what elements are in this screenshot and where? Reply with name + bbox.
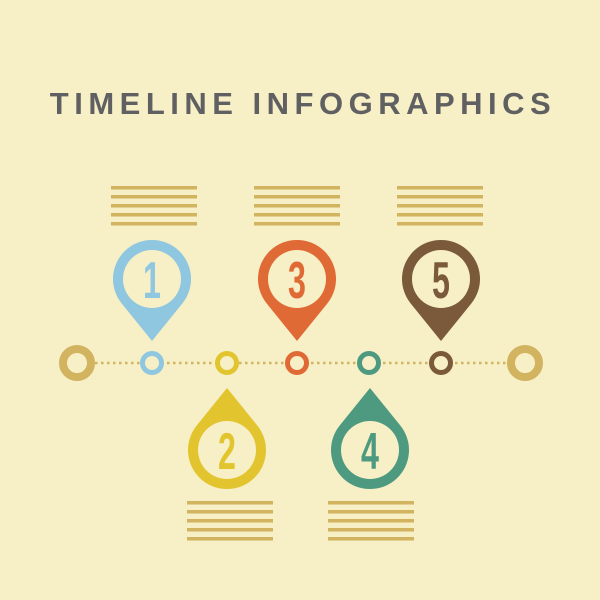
drop 4 (331, 388, 409, 489)
text lines 3 (254, 186, 340, 226)
drop 2: 2 (218, 423, 236, 481)
text lines 5 (397, 186, 483, 226)
timeline end circle (511, 349, 539, 377)
timeline dotted line (95, 362, 508, 364)
pin 3 (258, 240, 336, 341)
drop 4: 4 (361, 423, 379, 481)
pin 1 (113, 240, 191, 341)
timeline start circle (63, 349, 91, 377)
title: TIMELINE INFOGRAPHICS (50, 86, 556, 121)
drop 2 (188, 388, 266, 489)
pin 3: 3 (288, 252, 306, 310)
pin 5: 5 (432, 252, 450, 310)
pin 1: 1 (143, 252, 161, 310)
text lines 1 (111, 186, 197, 226)
pin 5 (402, 240, 480, 341)
text lines 2 (187, 501, 273, 540)
timeline nodes (142, 354, 450, 372)
text lines 4 (328, 501, 414, 540)
